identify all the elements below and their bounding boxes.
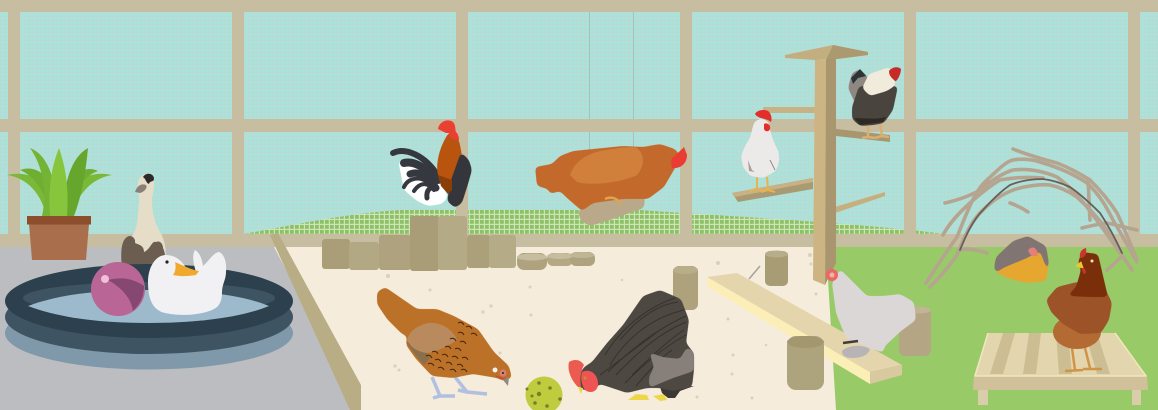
dark hen on perch [848, 67, 901, 138]
black hen [568, 290, 694, 401]
feather lines [600, 298, 686, 386]
scales [426, 322, 477, 372]
legs [432, 377, 487, 398]
wing [570, 147, 643, 184]
comb [671, 147, 687, 168]
right stump [899, 306, 931, 356]
floor: grass [826, 247, 1158, 410]
breast [437, 131, 464, 188]
floor: concrete [0, 247, 360, 410]
black tail [393, 151, 438, 198]
front stump [787, 336, 824, 390]
white duck [148, 250, 226, 315]
green ball [526, 376, 562, 410]
body [1046, 282, 1112, 334]
hen on log [535, 144, 687, 226]
body [377, 287, 512, 381]
wing [407, 340, 430, 365]
stump row [322, 216, 595, 271]
paddling pool [5, 264, 293, 370]
back stumps [673, 250, 788, 310]
far grass seen through mesh [243, 210, 945, 234]
white tail [398, 160, 448, 206]
body [576, 290, 694, 393]
comb [438, 120, 456, 133]
floor: sand [280, 247, 836, 410]
wooden frame [0, 0, 1158, 247]
black body [447, 152, 472, 208]
grey duck standing [121, 174, 166, 268]
legs [660, 386, 694, 398]
pot [29, 224, 89, 260]
grey belly [649, 347, 694, 388]
nesting crate [973, 333, 1148, 405]
diagonal edging board [270, 233, 361, 410]
nesting orange hen [994, 236, 1049, 283]
beach ball [91, 262, 145, 316]
legs [1065, 348, 1102, 371]
lavender hen on ramp [826, 269, 916, 358]
log [578, 196, 645, 226]
brown hen on crate [1046, 248, 1112, 371]
wire mesh background [0, 0, 1158, 240]
white hen on perch [741, 110, 779, 192]
brown hen with scales [377, 287, 512, 398]
comb [568, 360, 584, 387]
ramp plank [707, 273, 902, 384]
leaves [7, 148, 112, 216]
rooster on stump [393, 120, 472, 208]
branch arch [926, 149, 1137, 287]
neck [1067, 252, 1108, 297]
lower body [1053, 315, 1101, 349]
face [581, 371, 598, 392]
potted plant [7, 148, 112, 260]
perch tree [732, 45, 890, 285]
body [535, 144, 682, 211]
feet [628, 394, 649, 400]
sand specks [386, 253, 818, 400]
